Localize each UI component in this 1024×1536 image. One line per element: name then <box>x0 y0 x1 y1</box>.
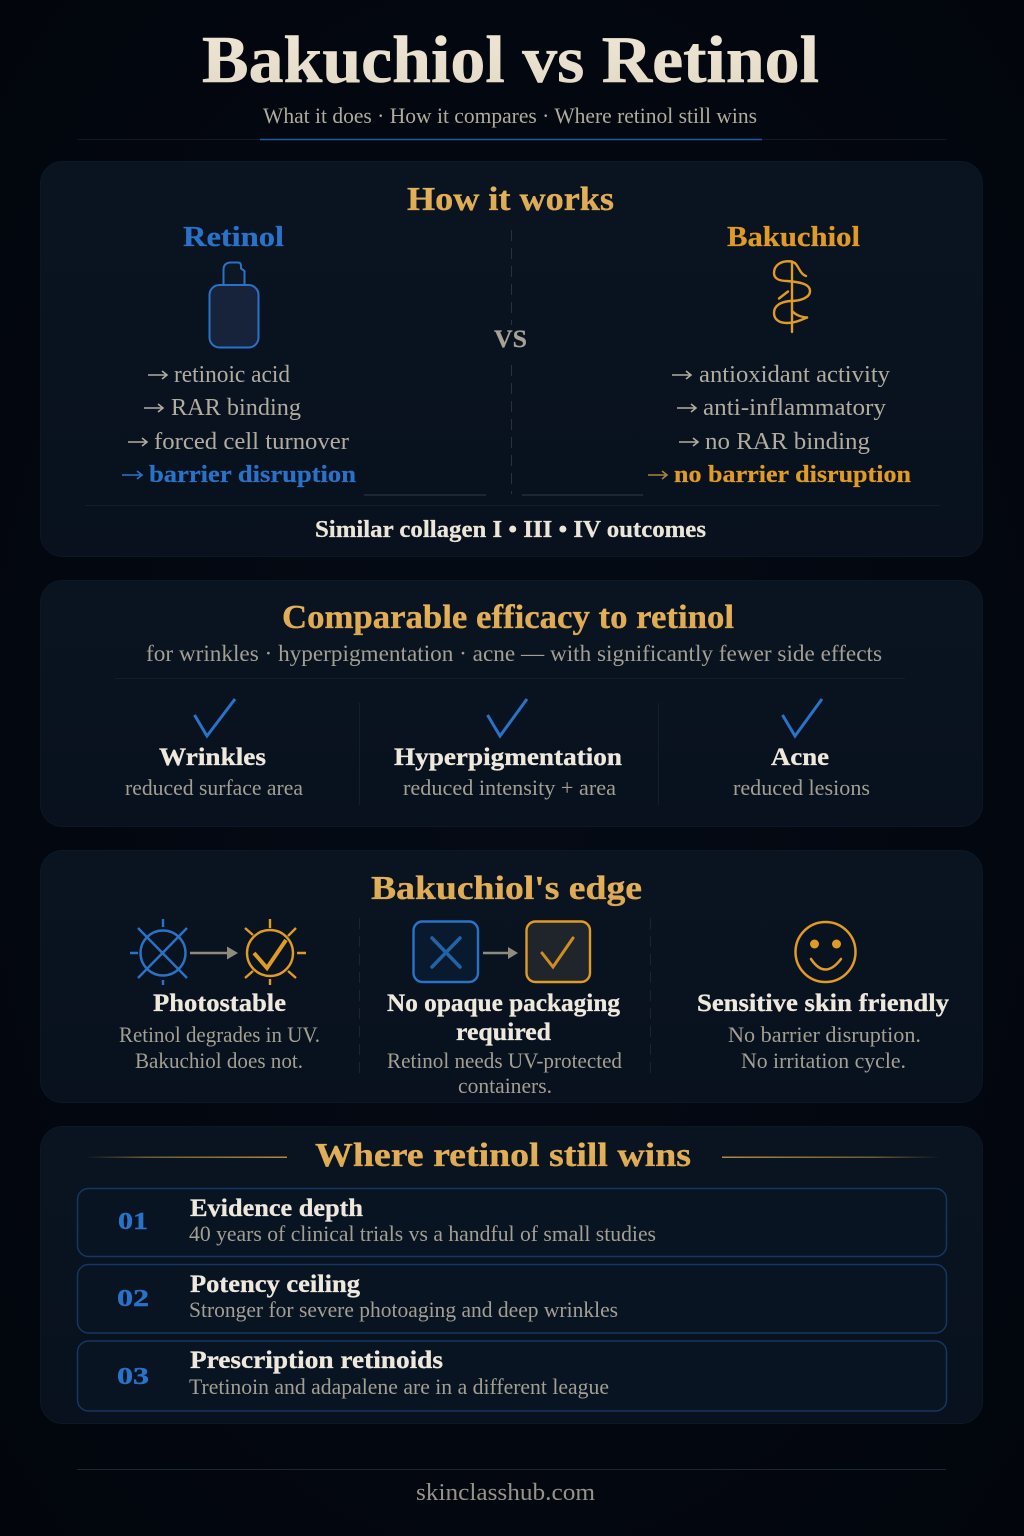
item: packaging: No opaque packaging <box>387 988 620 1017</box>
panel: bakuchiol's edge <box>40 850 982 1102</box>
row 01: 01 <box>118 1209 148 1235</box>
row 01 <box>78 1188 946 1256</box>
row 03 <box>78 1341 946 1411</box>
retinol pathway list: barrier disruption <box>149 462 356 488</box>
heading: comparable efficacy: Comparable efficacy to retinol <box>282 599 734 636</box>
bakuchiol pathway list: anti-inflammatory <box>703 395 886 421</box>
icon: check <box>194 699 235 736</box>
footer: skinclasshub.com <box>416 1480 595 1506</box>
item: acne: Acne <box>771 742 829 771</box>
title: Bakuchiol vs Retinol <box>202 23 819 97</box>
item: acne <box>733 699 870 800</box>
item: packaging: Retinol needs UV-protected <box>387 1048 622 1073</box>
retinol pathway list: forced cell turnover <box>154 429 349 455</box>
heading: how it works: How it works <box>407 181 614 218</box>
item: hyperpigmentation: reduced intensity + area <box>403 775 616 800</box>
item: photostable: Retinol degrades in UV. <box>119 1022 320 1047</box>
retinol pathway list <box>122 362 356 488</box>
subtitle: What it does · How it compares · Where retinol still wins <box>263 103 757 128</box>
row 03: Prescription retinoids <box>190 1345 443 1374</box>
bakuchiol pathway list: antioxidant activity <box>699 362 890 388</box>
bakuchiol pathway list <box>648 362 911 488</box>
row 02: Potency ceiling <box>190 1269 360 1298</box>
header rule <box>78 138 946 140</box>
row 02: Stronger for severe photoaging and deep wrinkles <box>189 1297 618 1322</box>
column: retinol <box>122 221 356 488</box>
column: bakuchiol <box>648 221 911 488</box>
panel: where retinol still wins <box>40 1126 982 1424</box>
item: sensitive skin: Sensitive skin friendly <box>697 988 949 1017</box>
icon: plant helix <box>774 261 810 332</box>
item: sensitive skin: No irritation cycle. <box>741 1048 906 1073</box>
item: photostable: Bakuchiol does not. <box>135 1048 303 1073</box>
icon: check <box>782 699 822 736</box>
row 03: 03 <box>117 1364 149 1390</box>
item: packaging <box>387 922 622 1098</box>
panel: comparable efficacy <box>40 580 982 826</box>
heading: where retinol still wins: Where retinol still wins <box>315 1137 691 1174</box>
item: hyperpigmentation <box>394 699 622 800</box>
efficacy subheading: for wrinkles · hyperpigmentation · acne — with significantly fewer side effects <box>146 641 882 666</box>
panel: how it works <box>40 162 982 556</box>
row 01: 40 years of clinical trials vs a handful of small studies <box>189 1221 656 1246</box>
retinol pathway list: RAR binding <box>171 395 301 421</box>
icon: box cross to box check <box>414 922 590 982</box>
item: wrinkles: reduced surface area <box>125 775 303 800</box>
row 03: Tretinoin and adapalene are in a different league <box>189 1374 609 1399</box>
icon: check <box>488 699 527 736</box>
heading: bakuchiol's edge: Bakuchiol's edge <box>371 870 642 907</box>
retinol heading: Retinol <box>183 221 284 253</box>
row 02 <box>78 1264 946 1333</box>
item: packaging: required <box>456 1017 551 1046</box>
item: acne: reduced lesions <box>733 775 870 800</box>
item: photostable <box>119 919 320 1073</box>
item: hyperpigmentation: Hyperpigmentation <box>394 742 622 771</box>
item: wrinkles <box>125 699 303 800</box>
item: sensitive skin <box>697 922 949 1073</box>
item: packaging: containers. <box>458 1073 552 1098</box>
item: wrinkles: Wrinkles <box>159 742 266 771</box>
bakuchiol pathway list: no RAR binding <box>705 429 870 455</box>
retinol pathway list: retinoic acid <box>174 362 290 388</box>
item: sensitive skin: No barrier disruption. <box>728 1022 921 1047</box>
icon: smiley <box>796 922 856 982</box>
bakuchiol pathway list: no barrier disruption <box>674 462 911 488</box>
icon: bottle <box>210 262 258 348</box>
row 01: Evidence depth <box>190 1193 363 1222</box>
collagen summary: Similar collagen I • III • IV outcomes <box>315 517 706 543</box>
vs divider: VS <box>494 326 527 353</box>
bakuchiol heading: Bakuchiol <box>727 221 860 253</box>
icon: crossed sun to checked sun <box>130 919 306 985</box>
item: photostable: Photostable <box>153 988 286 1017</box>
row 02: 02 <box>117 1286 149 1312</box>
